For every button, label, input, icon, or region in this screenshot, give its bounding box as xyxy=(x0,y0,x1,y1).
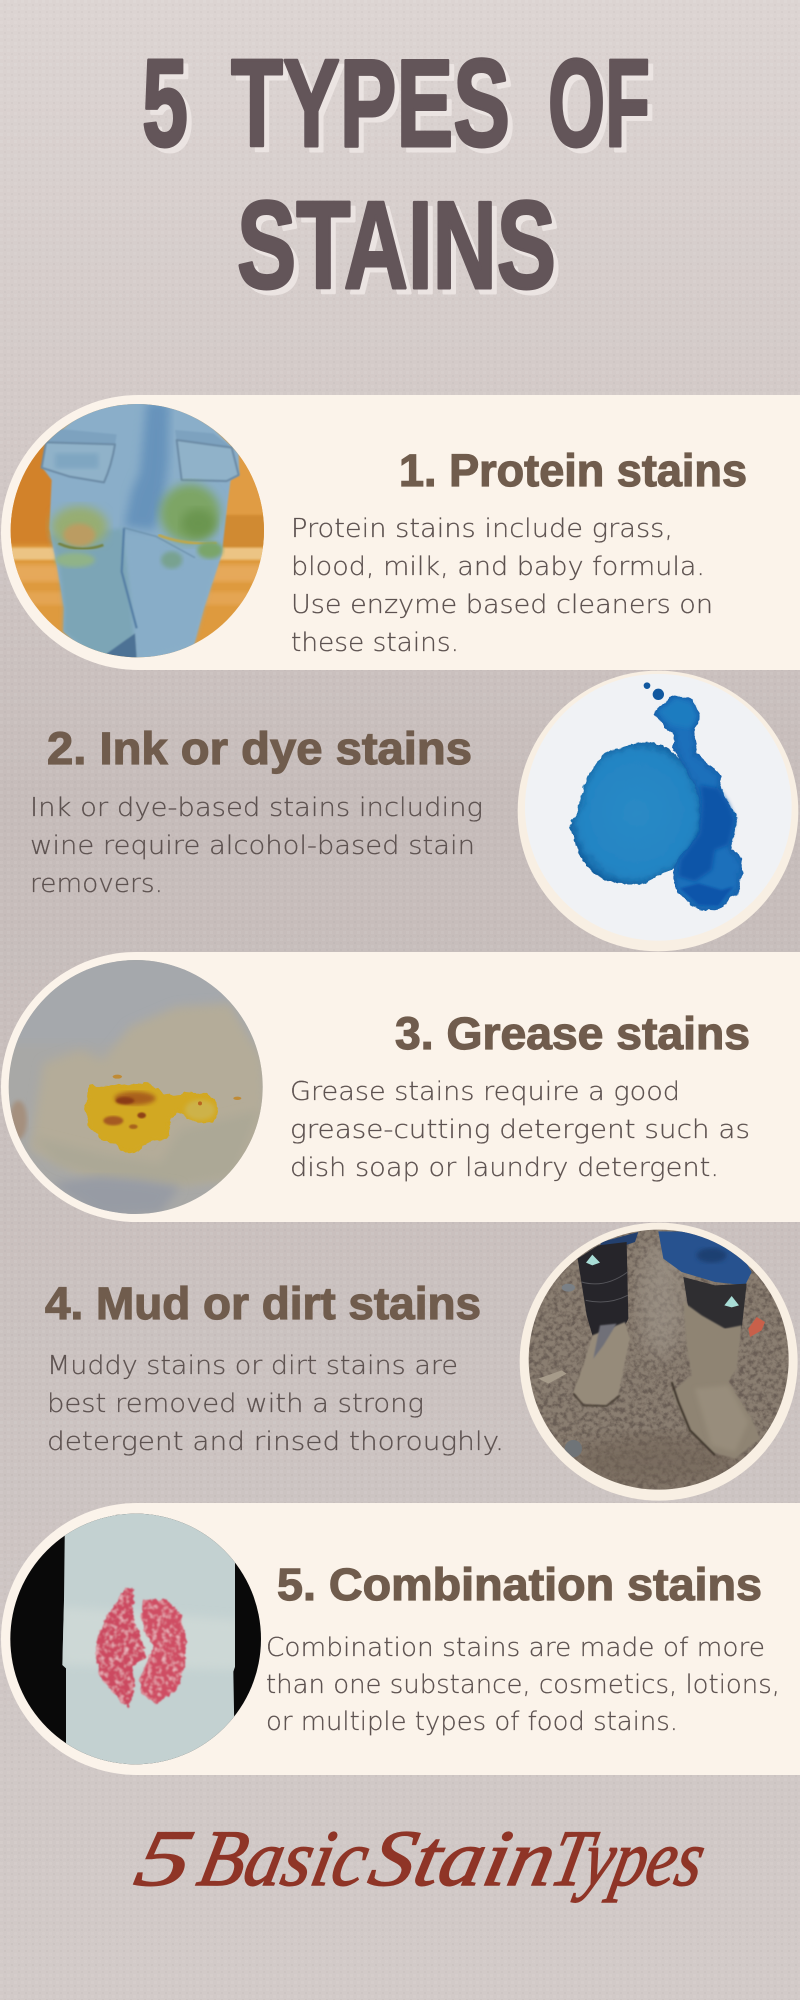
footer script: 5 basic stain types: Types xyxy=(544,1815,713,1903)
body: ink or dye stains: wine require alcohol-based stain xyxy=(30,831,475,861)
heading: protein stains: 1. Protein stains xyxy=(399,445,747,496)
body: combination stains: or multiple types of food stains. xyxy=(266,1707,678,1737)
left pocket flap xyxy=(42,429,117,482)
body: ink or dye stains xyxy=(30,793,483,899)
body: grease stains xyxy=(290,1077,750,1183)
footer script: 5 basic stain types: Stain xyxy=(362,1815,564,1903)
heading: grease stains: 3. Grease stains xyxy=(395,1008,750,1059)
body: combination stains xyxy=(266,1633,780,1737)
body: combination stains: Combination stains are made of more xyxy=(266,1633,765,1663)
body: ink or dye stains: Ink or dye-based stains including xyxy=(30,793,483,823)
heading: ink or dye stains: 2. Ink or dye stains xyxy=(47,723,472,774)
body: protein stains: Use enzyme based cleaners on xyxy=(291,590,713,620)
footer script: 5 basic stain types: 5 xyxy=(128,1815,201,1903)
grass stain left xyxy=(51,506,108,567)
body: ink or dye stains: removers. xyxy=(30,869,163,899)
panel: 3 grease stains xyxy=(1,952,800,1222)
photo: muddy boots xyxy=(520,1223,798,1501)
body: grease stains: Grease stains require a good xyxy=(290,1077,680,1107)
heading: mud or dirt stains: 4. Mud or dirt stains xyxy=(45,1278,481,1329)
panel: 4 mud or dirt stains xyxy=(45,1223,798,1501)
title: 5 xyxy=(142,35,188,173)
photo: grass-stained jeans xyxy=(7,398,273,662)
footer script: 5 basic stain types xyxy=(128,1815,713,1903)
body: mud or dirt stains xyxy=(47,1351,504,1457)
body: protein stains xyxy=(291,514,713,658)
title xyxy=(142,35,650,315)
title: TYPES xyxy=(231,35,510,173)
panel: 5 combination stains xyxy=(1,1503,800,1775)
body: grease stains: grease-cutting detergent such as xyxy=(290,1115,750,1145)
photo: blue ink blot xyxy=(518,670,798,951)
photo: grease stain on paper xyxy=(7,957,267,1217)
title: OF xyxy=(548,35,650,173)
body: combination stains: than one substance, cosmetics, lotions, xyxy=(266,1670,780,1700)
body: mud or dirt stains: detergent and rinsed thoroughly. xyxy=(47,1427,504,1457)
title: STAINS xyxy=(237,177,556,315)
footer script: 5 basic stain types: Basic xyxy=(191,1815,377,1903)
body: mud or dirt stains: best removed with a strong xyxy=(47,1389,424,1419)
grass stain right xyxy=(158,484,223,569)
left boot xyxy=(573,1232,638,1406)
panel: 2 ink or dye stains xyxy=(30,670,798,951)
right pocket flap xyxy=(175,430,239,481)
photo: lipstick on tissue xyxy=(7,1510,267,1770)
body: mud or dirt stains: Muddy stains or dirt stains are xyxy=(47,1351,458,1381)
lipstick print xyxy=(96,1587,186,1708)
body: protein stains: blood, milk, and baby formula. xyxy=(291,552,705,582)
heading: combination stains: 5. Combination stains xyxy=(277,1559,762,1610)
body: protein stains: these stains. xyxy=(291,628,459,658)
body: grease stains: dish soap or laundry detergent. xyxy=(290,1153,719,1183)
panel: 1 protein stains xyxy=(1,395,800,670)
body: protein stains: Protein stains include grass, xyxy=(291,514,673,544)
right boot xyxy=(658,1231,760,1459)
